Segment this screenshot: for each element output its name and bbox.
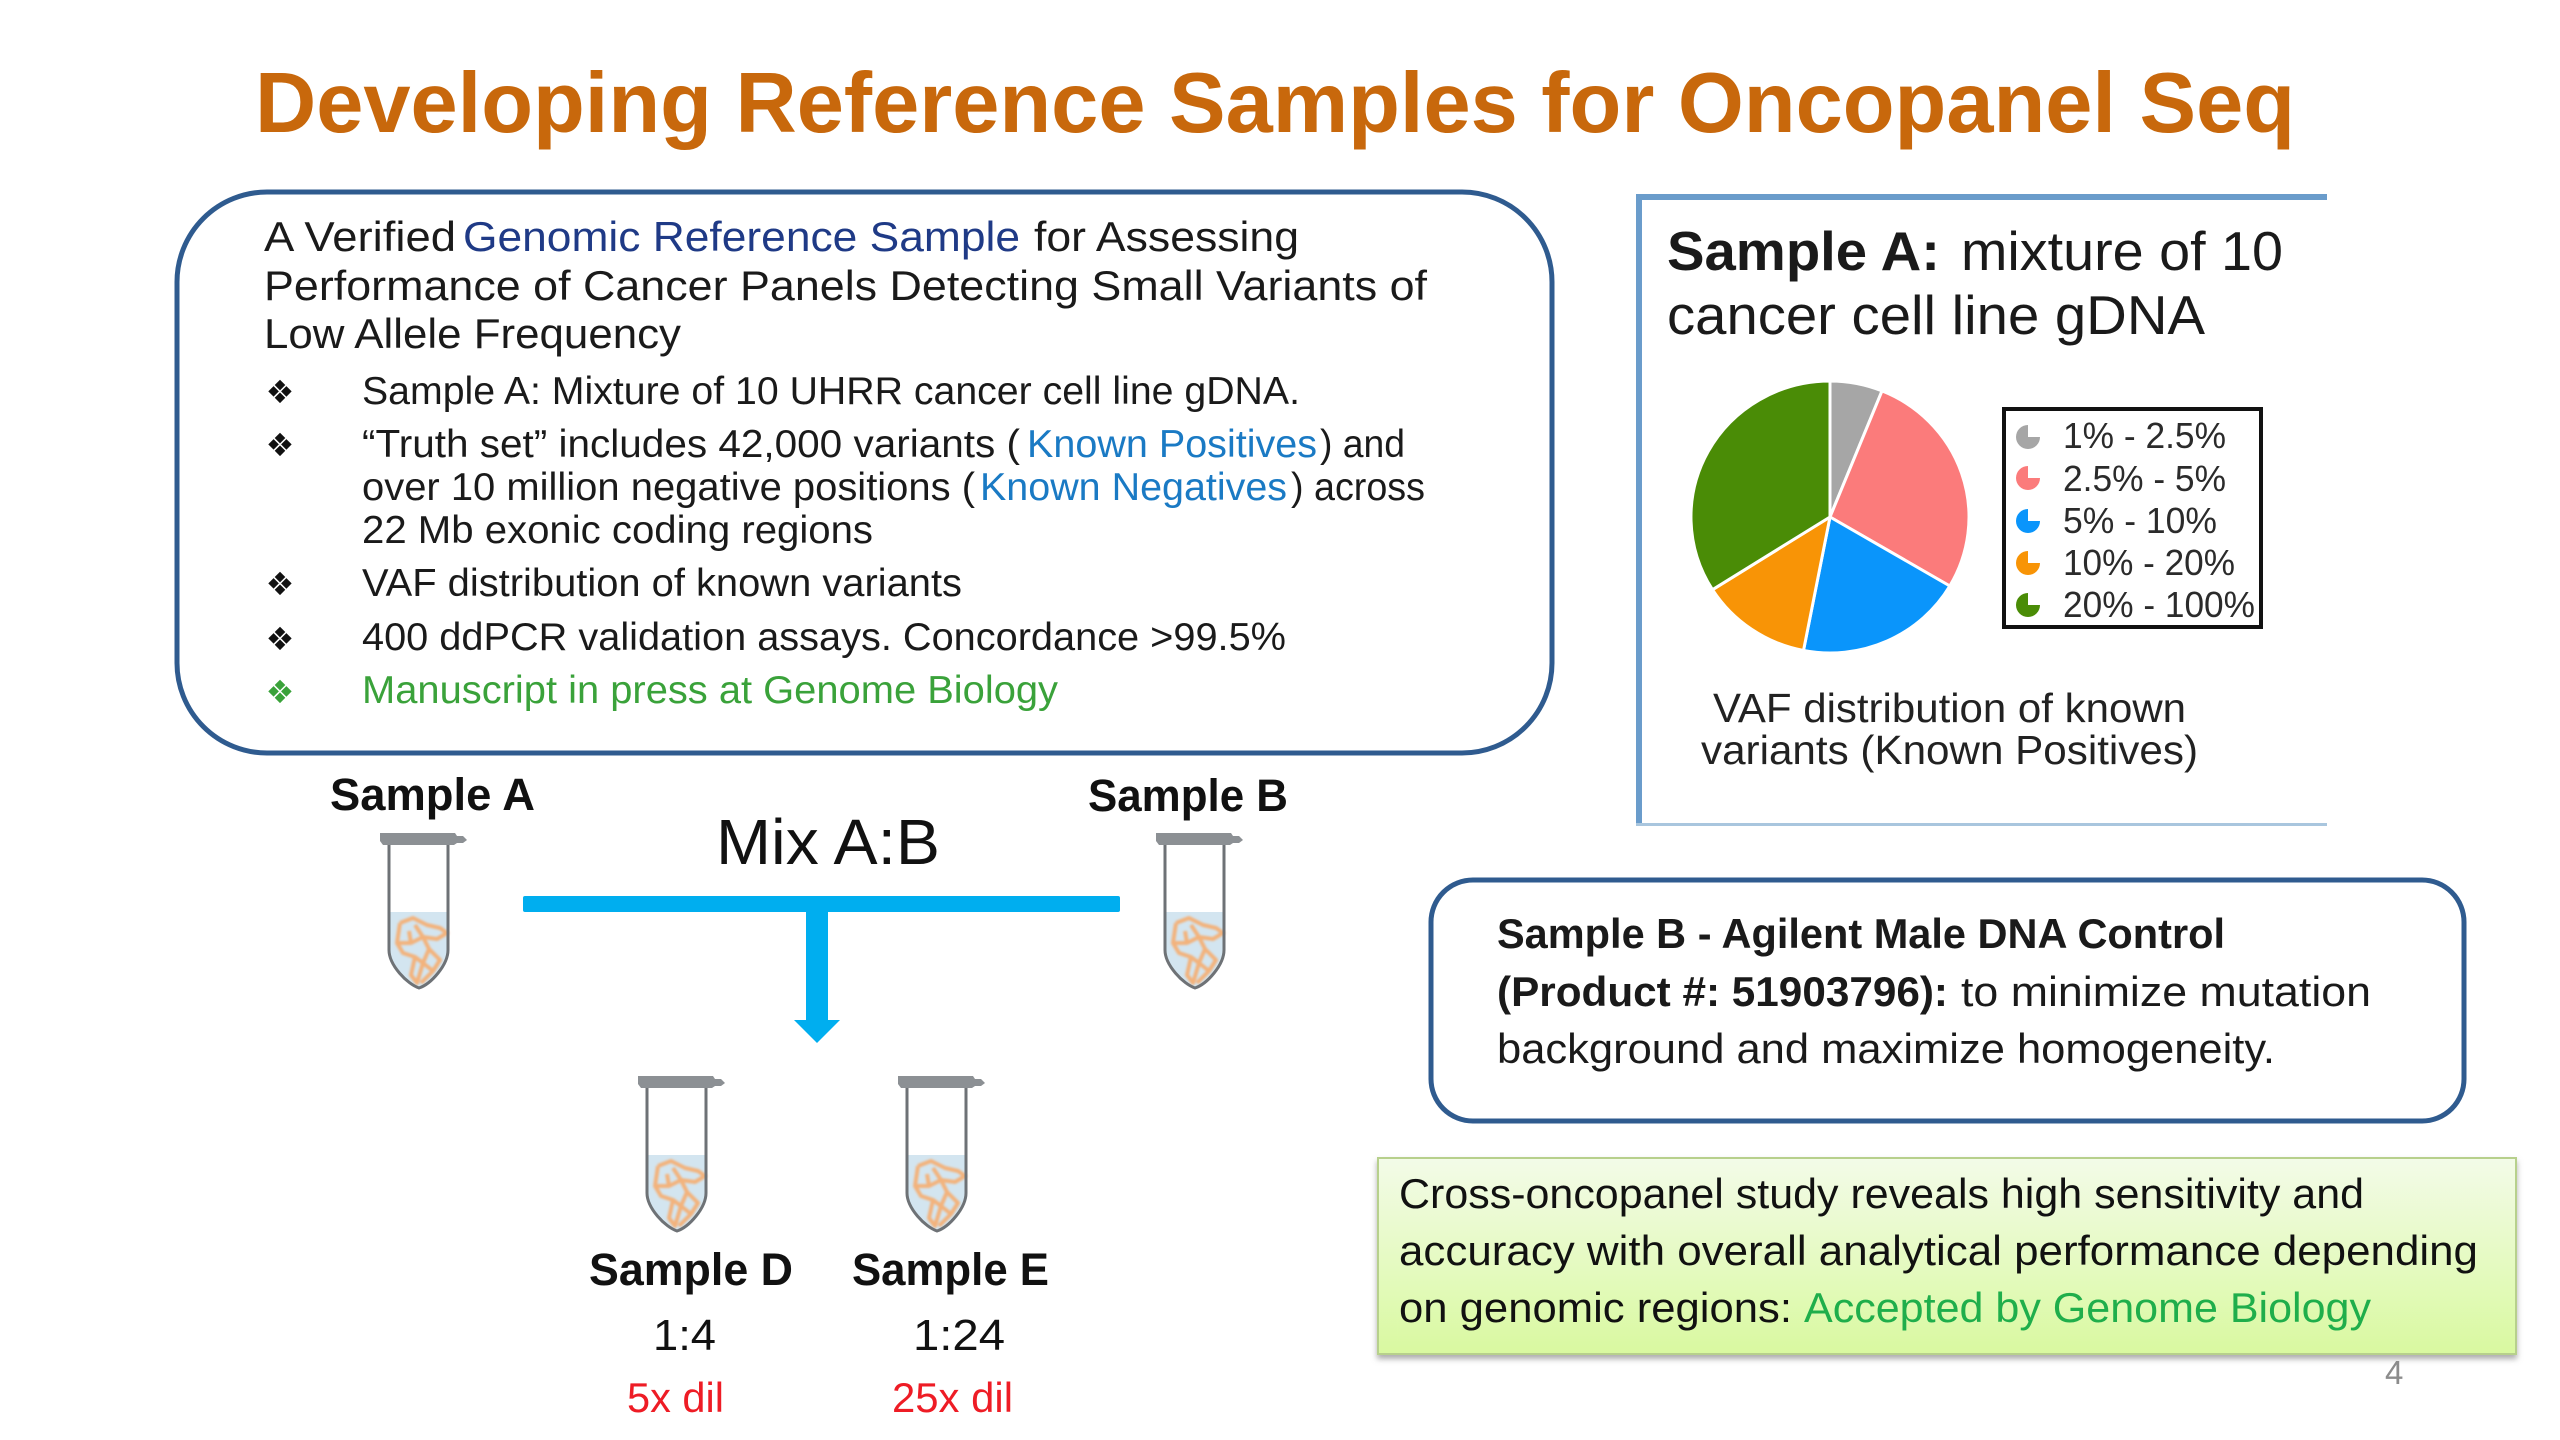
page number: 4 [2385,1354,2403,1391]
ratio: 1:4: 1:4 [653,1311,716,1360]
panel heading: Low Allele Frequency [264,310,681,357]
bullet list: VAF distribution of known variants [362,562,962,605]
pie legend: 20% - 100% [2063,584,2255,625]
pie legend [2004,409,2261,627]
label: mix A:B: Mix A:B [716,806,940,878]
dilution: 5x: 5x dil [627,1374,724,1421]
bullet list: Known Positives [1027,423,1317,466]
tube: sample A [380,833,467,988]
label: sample B: Sample B [1088,770,1288,821]
bullet list: Sample A: Mixture of 10 UHRR cancer cell line gDNA. [362,370,1300,413]
panel: mixing diagram [330,769,1288,1421]
ratio: 1:24: 1:24 [913,1311,1005,1360]
pie caption [1701,685,2198,773]
panel: verified genomic reference sample [177,192,1552,753]
callout: cross-oncopanel study: Cross-oncopanel study reveals high sensitivity and [1399,1170,2364,1217]
bullet list [266,370,1425,712]
tube: sample E [898,1076,985,1231]
pie legend: 2.5% - 5% [2063,458,2226,499]
bullet list: Known Negatives [980,466,1287,509]
panel: sample A pie chart [1636,194,2327,826]
bullet list: ❖ [266,620,294,658]
pie caption: variants (Known Positives) [1701,727,2198,773]
panel heading [264,213,1427,357]
title: Developing Reference Samples for Oncopanel Seq [255,56,2295,151]
label: sample E: Sample E [852,1244,1049,1295]
panel: sample B description: to minimize mutation [1961,968,2371,1015]
panel heading: for Assessing [1034,213,1299,260]
bullet list: ❖ [266,373,294,411]
bullet list: ❖ [266,673,294,711]
bullet list: “Truth set” includes 42,000 variants ( [362,423,1020,466]
panel heading: A Verified [264,213,456,260]
callout: cross-oncopanel study: Accepted by Genome Biology [1804,1284,2371,1331]
callout: cross-oncopanel study: accuracy with overall analytical performance depending [1399,1227,2478,1274]
panel: sample B description [1431,880,2464,1121]
panel: sample B description: Sample B - Agilent Male DNA Control [1497,910,2225,957]
arrow: mix to dilutions [523,896,1120,1043]
panel: sample B description: (Product #: 51903796): [1497,968,1948,1015]
tube: sample B [1156,833,1243,988]
label: sample D: Sample D [589,1244,793,1295]
bullet list: ❖ [266,426,294,464]
sample A heading: Sample A: [1667,220,1940,282]
callout: cross-oncopanel study: on genomic regions: [1399,1284,1792,1331]
bullet list: over 10 million negative positions ( [362,466,975,509]
pie chart: VAF distribution [1691,381,1969,653]
bullet list: ) across [1291,466,1425,509]
bullet list: 400 ddPCR validation assays. Concordance >99.5% [362,616,1286,659]
label: sample A: Sample A [330,769,535,820]
panel heading: Genomic Reference Sample [463,213,1020,260]
sample A heading: cancer cell line gDNA [1667,284,2205,346]
bullet list: ❖ [266,565,294,603]
sample A heading [1667,220,2283,346]
panel heading: Performance of Cancer Panels Detecting Small Variants of [264,262,1427,309]
callout: cross-oncopanel study [1378,1158,2516,1354]
pie legend: 10% - 20% [2063,542,2235,583]
pie legend: 5% - 10% [2063,500,2217,541]
dilution: 25x: 25x dil [892,1374,1013,1421]
pie legend: 1% - 2.5% [2063,415,2226,456]
bullet list: ) and [1320,423,1405,466]
tube: sample D [638,1076,725,1231]
bullet list: 22 Mb exonic coding regions [362,509,873,552]
sample A heading: mixture of 10 [1961,220,2283,282]
pie caption: VAF distribution of known [1713,685,2186,731]
bullet list: Manuscript in press at Genome Biology [362,669,1059,712]
panel: sample B description: background and maximize homogeneity. [1497,1025,2275,1072]
